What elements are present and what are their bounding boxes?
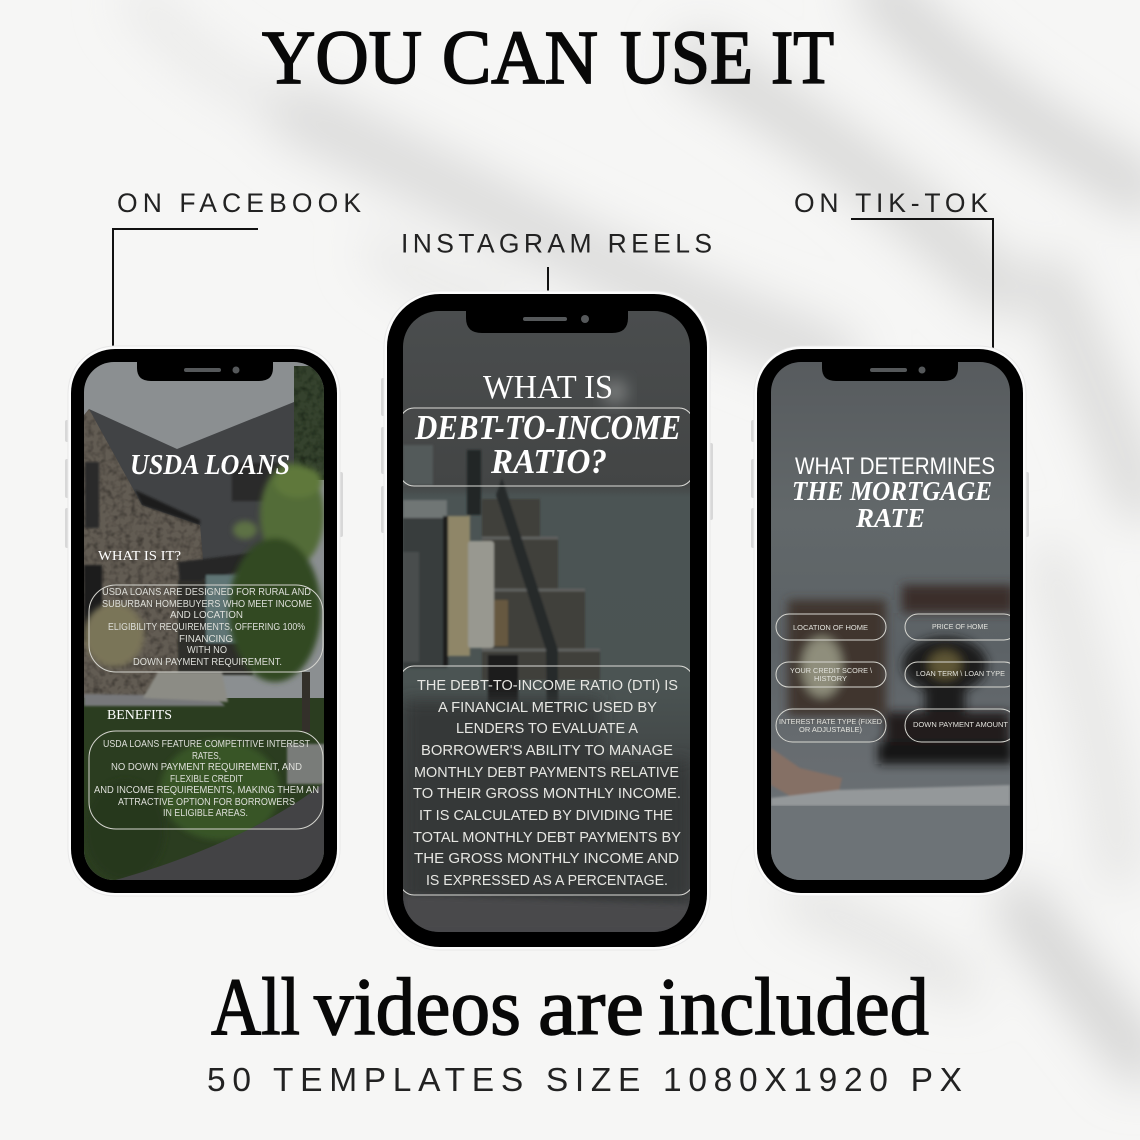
screen photo: house [84,362,327,882]
text: dti explanation [413,678,681,889]
pill: loan term: LOAN TERM \ LOAN TYPE [916,669,1005,678]
title [262,16,834,100]
text: what is it: FINANCING [179,634,233,645]
text: dti explanation: IS EXPRESSED AS A PERCENTAGE. [426,873,668,889]
heading: debt-to-income ratio [414,408,681,481]
heading: usda loans: USDA LOANS [130,449,290,481]
pill: price of home: PRICE OF HOME [932,622,988,631]
notch [466,311,628,333]
title: IT [771,16,834,100]
connector: instagram [547,267,549,292]
text: benefits: AND INCOME REQUIREMENTS, MAKING THEM AN [94,785,319,796]
text: dti explanation: TOTAL MONTHLY DEBT PAYMENTS BY [413,830,681,846]
pill: credit score [776,662,886,687]
text: dti explanation: MONTHLY DEBT PAYMENTS RELATIVE [414,765,679,781]
heading: debt-to-income ratio: DEBT-TO-INCOME [414,408,681,447]
text: benefits: ATTRACTIVE OPTION FOR BORROWERS [118,797,295,808]
connector: facebook [113,229,258,348]
text: dti explanation: THE GROSS MONTHLY INCOME AND [414,851,679,867]
pill: interest rate type: INTEREST RATE TYPE (FIXED [779,717,883,726]
text: benefits: IN ELIGIBLE AREAS. [163,808,248,819]
heading: all videos are included: included [658,961,929,1052]
box: benefits [89,731,323,829]
speaker [523,317,567,321]
text: dti explanation: BORROWER'S ABILITY TO MANAGE [421,743,673,759]
speaker [184,368,221,372]
text: benefits: FLEXIBLE CREDIT [170,774,243,785]
pill: price of home [905,614,1017,640]
text: dti explanation: A FINANCIAL METRIC USED BY [438,700,657,716]
heading: all videos are included: videos [314,961,521,1052]
pill: interest rate type: OR ADJUSTABLE) [799,725,862,734]
text: benefits: RATES, [192,751,221,762]
connector: tik-tok [851,219,993,348]
text: dti explanation: TO THEIR GROSS MONTHLY INCOME. [413,786,681,802]
camera [581,315,589,323]
heading: the mortgage rate: THE MORTGAGE [792,476,992,506]
title: USE [620,16,753,100]
label: on facebook: ON FACEBOOK [117,188,361,218]
pill: loan term [905,662,1017,687]
heading: all videos are included: All [211,961,300,1052]
title: YOU [262,16,422,100]
text: what is it: SUBURBAN HOMEBUYERS WHO MEET INCOME [102,599,312,610]
heading: what determines: WHAT DETERMINES [795,453,995,480]
pills [776,614,1017,742]
phone: instagram reels [381,291,713,950]
pill: credit score: HISTORY [814,674,847,683]
text: what is it: USDA LOANS ARE DESIGNED FOR RURAL AND [102,587,311,598]
pill: down payment: DOWN PAYMENT AMOUNT [913,720,1008,729]
pill: interest rate type [776,709,886,742]
heading: debt-to-income ratio: RATIO? [490,442,607,481]
pill: location of home: LOCATION OF HOME [793,623,868,632]
text: dti explanation: THE DEBT-TO-INCOME RATIO (DTI) IS [417,678,678,694]
text: what is it: ELIGIBILITY REQUIREMENTS, OFFERING 100% [108,622,305,633]
heading: the mortgage rate [792,476,992,533]
text: dti explanation: IT IS CALCULATED BY DIVIDING THE [419,808,673,824]
pill: down payment [905,709,1017,742]
speaker [870,368,907,372]
subheading: templates size: 50 TEMPLATES SIZE 1080X1920 PX [207,1062,962,1099]
text: benefits [94,739,319,819]
text: benefits: USDA LOANS FEATURE COMPETITIVE INTEREST [103,739,310,750]
heading: the mortgage rate: RATE [855,503,925,533]
pill: location of home [776,614,886,640]
notch [822,362,958,381]
text: what is it: AND LOCATION [170,610,243,621]
camera [918,366,926,374]
text: what is it: DOWN PAYMENT REQUIREMENT. [133,657,282,668]
phone: facebook [65,346,343,896]
pill: credit score: YOUR CREDIT SCORE \ [790,666,873,675]
heading: all videos are included: are [538,961,644,1052]
title: CAN [442,16,598,100]
label: on tik-tok: ON TIK-TOK [794,188,988,218]
camera [232,366,240,374]
phone: tik-tok [751,346,1029,896]
text: dti explanation: LENDERS TO EVALUATE A [456,721,638,737]
text: what is it [102,587,312,668]
screen photo: gavel [771,362,1014,880]
text: what is it: WITH NO [187,645,227,656]
box: what is it [89,585,323,672]
heading: benefits: BENEFITS [107,708,172,723]
text: benefits: NO DOWN PAYMENT REQUIREMENT, AND [111,762,302,773]
screen photo: stairs [400,311,693,932]
heading: what is: WHAT IS [483,369,613,406]
notch [137,362,273,381]
heading: what is it: WHAT IS IT? [98,549,181,564]
heading: all videos are included [211,961,929,1052]
label: instagram reels: INSTAGRAM REELS [401,228,712,258]
